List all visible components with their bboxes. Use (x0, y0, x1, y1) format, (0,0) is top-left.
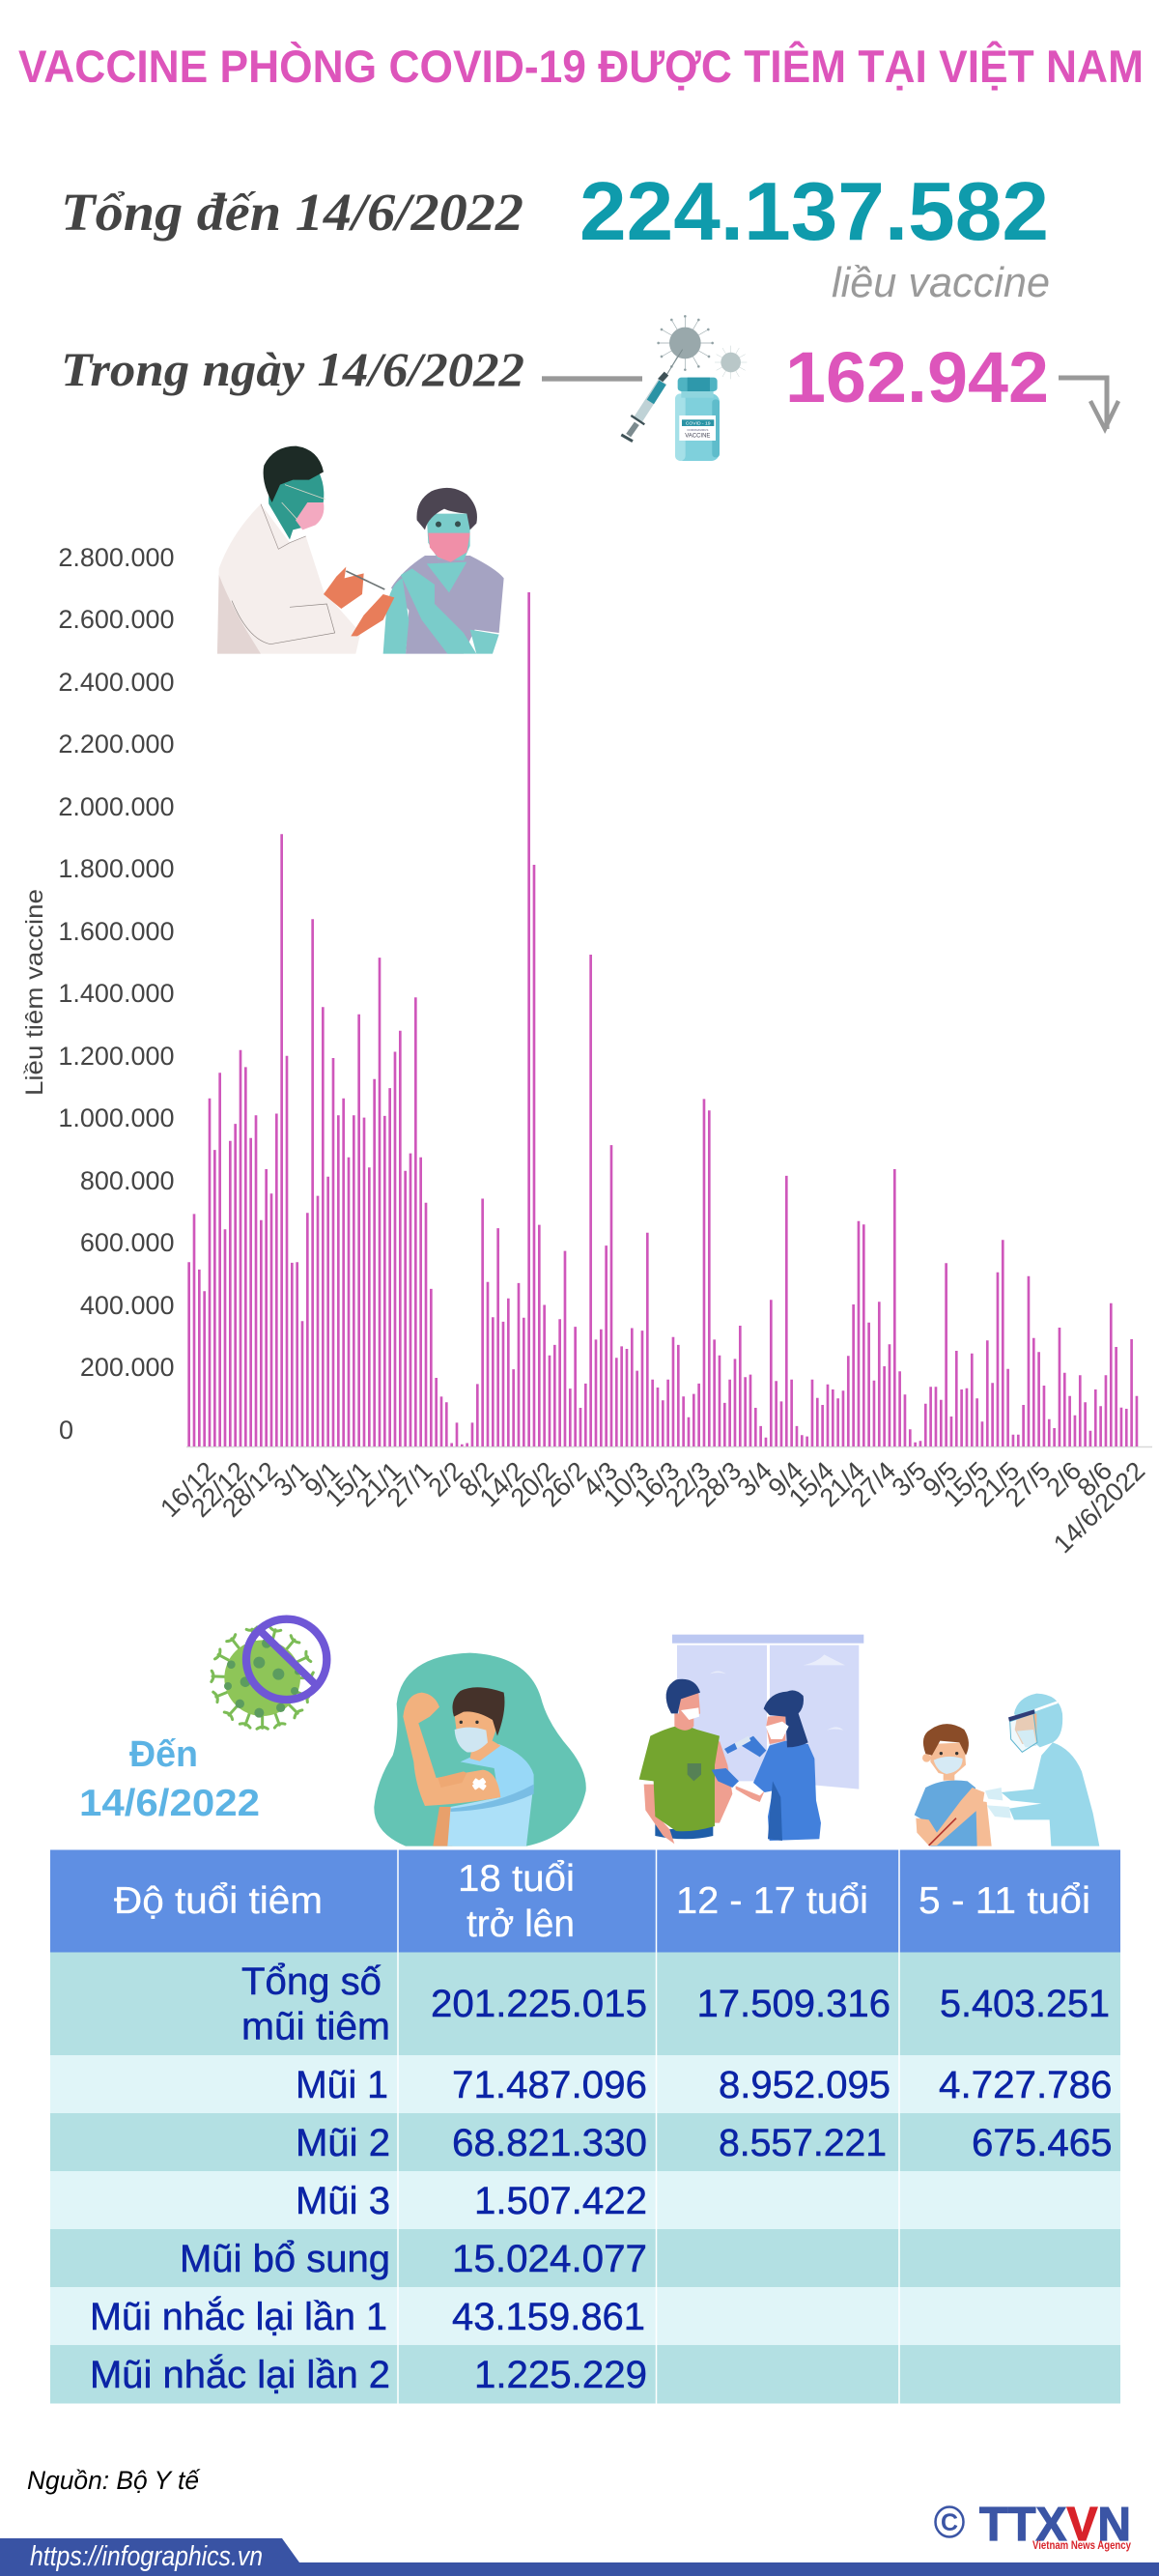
logo: TTXVN: C (941, 2509, 958, 2536)
table header row: trở lên (466, 1903, 575, 1945)
logo: TTXVN: TTXVN (979, 2499, 1131, 2551)
big number: doses in the day: 162.942 (785, 337, 1049, 417)
row: booster 1 (50, 2287, 1120, 2345)
y axis labels (58, 543, 174, 1445)
y axis labels: 1.000.000 (58, 1103, 174, 1132)
bar chart: daily doses (21, 543, 1152, 1559)
x axis date labels: 9/1 (298, 1456, 345, 1503)
logo: TTXVN: Vietnam News Agency (1032, 2538, 1131, 2552)
row: total shots: 5.403.251 (940, 1983, 1110, 2025)
row: additional dose: Mũi bổ sung (180, 2238, 390, 2280)
x axis date labels: 21/5 (969, 1456, 1025, 1512)
x axis date labels: 16/3 (629, 1456, 685, 1512)
row: total shots (50, 1952, 1120, 2055)
row: booster 2: Mũi nhắc lại lần 2 (90, 2353, 390, 2396)
table header row: 12 - 17 tuổi (676, 1880, 868, 1922)
footer bar with URL: https://infographics.vn (30, 2541, 263, 2572)
icon: virus with prohibition sign (212, 1619, 326, 1729)
table header row (50, 1849, 1120, 1952)
row: dose 3 (50, 2171, 1120, 2229)
label: as of date: 14/6/2022 (79, 1783, 260, 1824)
x axis date labels: 22/3 (660, 1456, 716, 1512)
x axis date labels: 26/2 (536, 1456, 592, 1512)
x axis date labels: 20/2 (505, 1456, 561, 1512)
row: additional dose (50, 2229, 1120, 2287)
x axis date labels: 15/5 (938, 1456, 994, 1512)
table header row: 5 - 11 tuổi (919, 1880, 1090, 1922)
bars (189, 592, 1137, 1446)
row: dose 2: 8.557.221 (719, 2122, 887, 2164)
x axis date labels: 3/4 (731, 1456, 777, 1503)
row: dose 1: 4.727.786 (939, 2064, 1113, 2106)
row: booster 2 (50, 2345, 1120, 2404)
table header row: 18 tuổi (458, 1858, 575, 1900)
x axis date labels: 21/4 (814, 1456, 870, 1512)
x axis date labels: 4/3 (577, 1456, 623, 1503)
label: as of date: Đến (129, 1734, 198, 1775)
row: dose 2: Mũi 2 (296, 2122, 390, 2164)
arrow: decrease (1059, 378, 1118, 429)
row: dose 3: 1.507.422 (474, 2180, 647, 2222)
table header row: Độ tuổi tiêm (114, 1880, 323, 1922)
y axis labels: 600.000 (80, 1228, 174, 1257)
row: additional dose: 15.024.077 (452, 2238, 647, 2280)
y axis labels: 1.400.000 (58, 979, 174, 1008)
y axis labels: 0 (59, 1416, 73, 1445)
row: dose 1 (50, 2055, 1120, 2113)
row: booster 2: 1.225.229 (474, 2354, 647, 2396)
x axis date labels: 8/2 (453, 1456, 499, 1503)
illustration: adolescent vaccinated by nurse (639, 1635, 863, 1844)
x axis date labels: 28/3 (691, 1456, 747, 1512)
source note: Nguồn: Bộ Y tế (27, 2466, 201, 2495)
icon: syringe, vial and viruses: CORONAVIRUS (687, 428, 708, 432)
row: dose 3: Mũi 3 (296, 2180, 390, 2222)
table: doses by age group (50, 1849, 1120, 2404)
row: total shots: 17.509.316 (697, 1983, 890, 2025)
x axis date labels: 3/1 (268, 1456, 314, 1503)
x axis date labels: 27/1 (382, 1456, 438, 1512)
illustration: vaccinated adult (374, 1653, 586, 1846)
x axis date labels: 2/6 (1040, 1456, 1087, 1503)
unit: vaccine doses: liều vaccine (832, 259, 1050, 306)
x axis date labels: 22/12 (185, 1456, 252, 1523)
y axis labels: 200.000 (80, 1353, 174, 1382)
x axis date labels: 3/5 (886, 1456, 932, 1503)
label: as of date (79, 1734, 260, 1824)
y axis labels: 2.800.000 (58, 543, 174, 572)
icon: syringe, vial and viruses (542, 315, 747, 461)
row: booster 1: 43.159.861 (452, 2296, 645, 2338)
icon: syringe, vial and viruses: VACCINE (685, 434, 710, 440)
row: dose 2: 675.465 (972, 2122, 1113, 2164)
y axis title: Liều tiêm vaccine (21, 889, 48, 1096)
row: dose 1: Mũi 1 (296, 2064, 388, 2106)
x axis date labels: 2/2 (422, 1456, 468, 1503)
x axis date labels: 15/1 (320, 1456, 376, 1512)
y axis labels: 2.200.000 (58, 730, 174, 758)
x axis date labels: 14/2 (474, 1456, 530, 1512)
x axis date labels: 14/6/2022 (1048, 1456, 1150, 1559)
x axis date labels: 28/12 (216, 1456, 283, 1523)
x axis date labels: 9/4 (762, 1456, 808, 1503)
x axis date labels: 10/3 (598, 1456, 654, 1512)
icon: syringe, vial and viruses: COVID - 19 (686, 421, 711, 427)
row: dose 2: 68.821.330 (452, 2122, 647, 2164)
row: dose 1: 71.487.096 (452, 2064, 647, 2106)
row: total shots: 201.225.015 (431, 1983, 647, 2025)
y axis labels: 400.000 (80, 1291, 174, 1320)
label: in the day: Trong ngày 14/6/2022 (61, 342, 524, 396)
row: booster 1: Mũi nhắc lại lần 1 (90, 2295, 387, 2338)
x axis date labels: 16/12 (155, 1456, 221, 1523)
y axis labels: 1.800.000 (58, 854, 174, 883)
y axis labels: 2.000.000 (58, 792, 174, 821)
row: total shots: mũi tiêm (241, 2006, 390, 2048)
illustration: doctor vaccinating patient (217, 446, 504, 654)
x axis date labels (155, 1456, 1150, 1559)
row: dose 1: 8.952.095 (719, 2064, 890, 2106)
y axis labels: 800.000 (80, 1166, 174, 1195)
y axis labels: 2.600.000 (58, 605, 174, 634)
axis line (186, 1445, 1152, 1447)
y axis labels: 1.200.000 (58, 1042, 174, 1071)
row: total shots: Tổng số (241, 1961, 382, 2003)
big number: total doses: 224.137.582 (580, 166, 1049, 258)
x axis date labels: 15/4 (783, 1456, 839, 1512)
x axis date labels: 9/5 (917, 1456, 963, 1503)
y axis labels: 2.400.000 (58, 668, 174, 697)
illustration: child vaccinated by health worker (915, 1694, 1099, 1846)
footer bar with URL (0, 2538, 1159, 2576)
x axis date labels: 21/1 (351, 1456, 407, 1512)
row: dose 2 (50, 2113, 1120, 2171)
y axis labels: 1.600.000 (58, 917, 174, 946)
label: total to date: Tổng đến 14/6/2022 (61, 183, 523, 242)
x axis date labels: 27/5 (1000, 1456, 1056, 1512)
x axis date labels: 8/6 (1071, 1456, 1117, 1503)
x axis date labels: 27/4 (845, 1456, 901, 1512)
